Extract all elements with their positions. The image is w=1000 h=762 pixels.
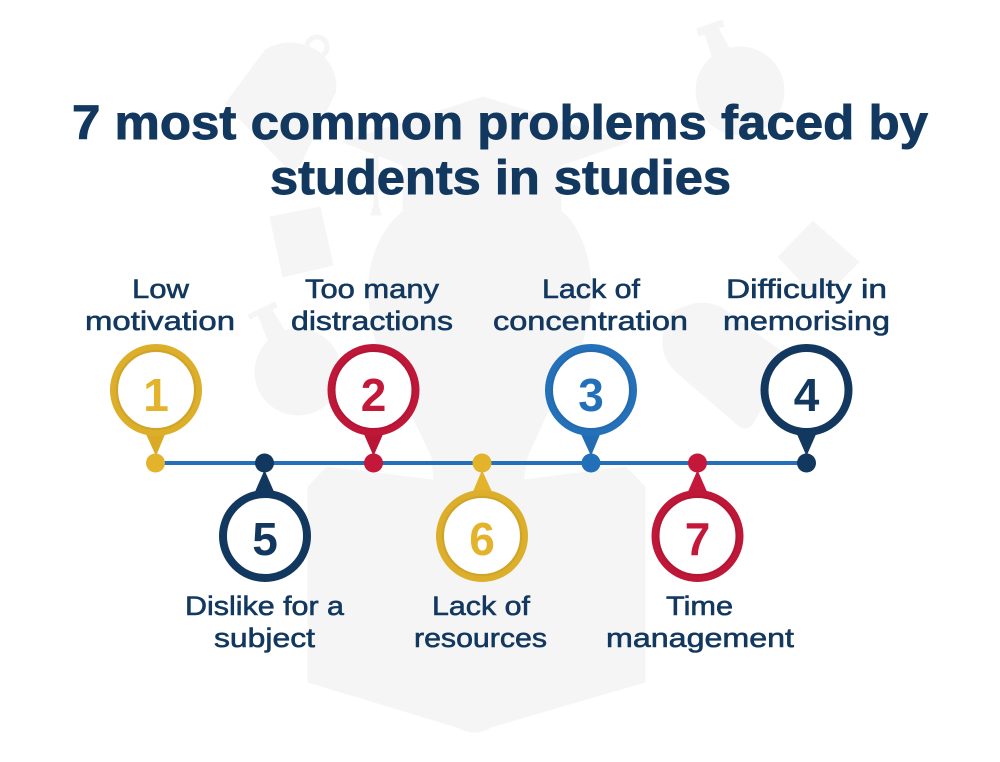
icon: mug handle bbox=[307, 37, 327, 57]
title: 7 most common problems faced by bbox=[72, 97, 928, 150]
marker 6: Lack of resources: 6 bbox=[469, 513, 495, 565]
marker 4: Difficulty in memorising: 4 bbox=[794, 369, 820, 421]
marker 4: Difficulty in memorising: memorising bbox=[723, 306, 890, 336]
icon: tilted bottle right bbox=[663, 303, 790, 428]
marker 7: Time management: management bbox=[606, 623, 795, 653]
marker 5: Dislike for a subject: subject bbox=[214, 623, 316, 653]
marker 7: Time management: Time bbox=[666, 591, 733, 621]
marker 3: Lack of concentration: 3 bbox=[578, 369, 604, 421]
marker 2: Too many distractions bbox=[291, 274, 453, 472]
icon: mug top left bbox=[226, 43, 335, 169]
marker 5: Dislike for a subject bbox=[185, 454, 344, 653]
title: students in studies bbox=[270, 152, 731, 205]
marker 1: Low motivation: 1 bbox=[143, 369, 169, 421]
timeline line bbox=[155, 461, 806, 465]
marker 7: Time management: 7 bbox=[685, 513, 710, 565]
marker 7: Time management bbox=[606, 454, 795, 653]
marker 2: Too many distractions: Too many bbox=[305, 274, 440, 304]
student body bbox=[369, 210, 591, 482]
open book bbox=[308, 467, 645, 732]
icon: diamond bbox=[779, 222, 858, 300]
background: student silhouette with icons bbox=[226, 20, 858, 732]
marker 3: Lack of concentration: concentration bbox=[493, 306, 688, 336]
icon: flask top right bbox=[696, 20, 784, 135]
marker 2: Too many distractions: distractions bbox=[291, 306, 453, 336]
icon: flask lower left bbox=[248, 302, 341, 415]
marker 3: Lack of concentration: Lack of bbox=[542, 274, 641, 304]
marker 6: Lack of resources bbox=[414, 454, 547, 653]
marker 1: Low motivation: Low bbox=[132, 274, 190, 304]
marker 5: Dislike for a subject: Dislike for a bbox=[185, 591, 344, 621]
title bbox=[72, 97, 928, 205]
marker 1: Low motivation bbox=[85, 274, 235, 472]
marker 6: Lack of resources: resources bbox=[414, 623, 547, 653]
icon: cap tassel bbox=[371, 150, 381, 215]
marker 4: Difficulty in memorising: Difficulty in bbox=[726, 274, 887, 304]
marker 4: Difficulty in memorising bbox=[723, 274, 890, 472]
marker 6: Lack of resources: Lack of bbox=[432, 591, 531, 621]
marker 1: Low motivation: motivation bbox=[85, 306, 235, 336]
icon: graduation cap bbox=[343, 97, 628, 215]
marker 5: Dislike for a subject: 5 bbox=[252, 513, 278, 565]
marker 3: Lack of concentration bbox=[493, 274, 688, 472]
icon: notebook bbox=[270, 207, 333, 277]
marker 2: Too many distractions: 2 bbox=[361, 369, 386, 421]
